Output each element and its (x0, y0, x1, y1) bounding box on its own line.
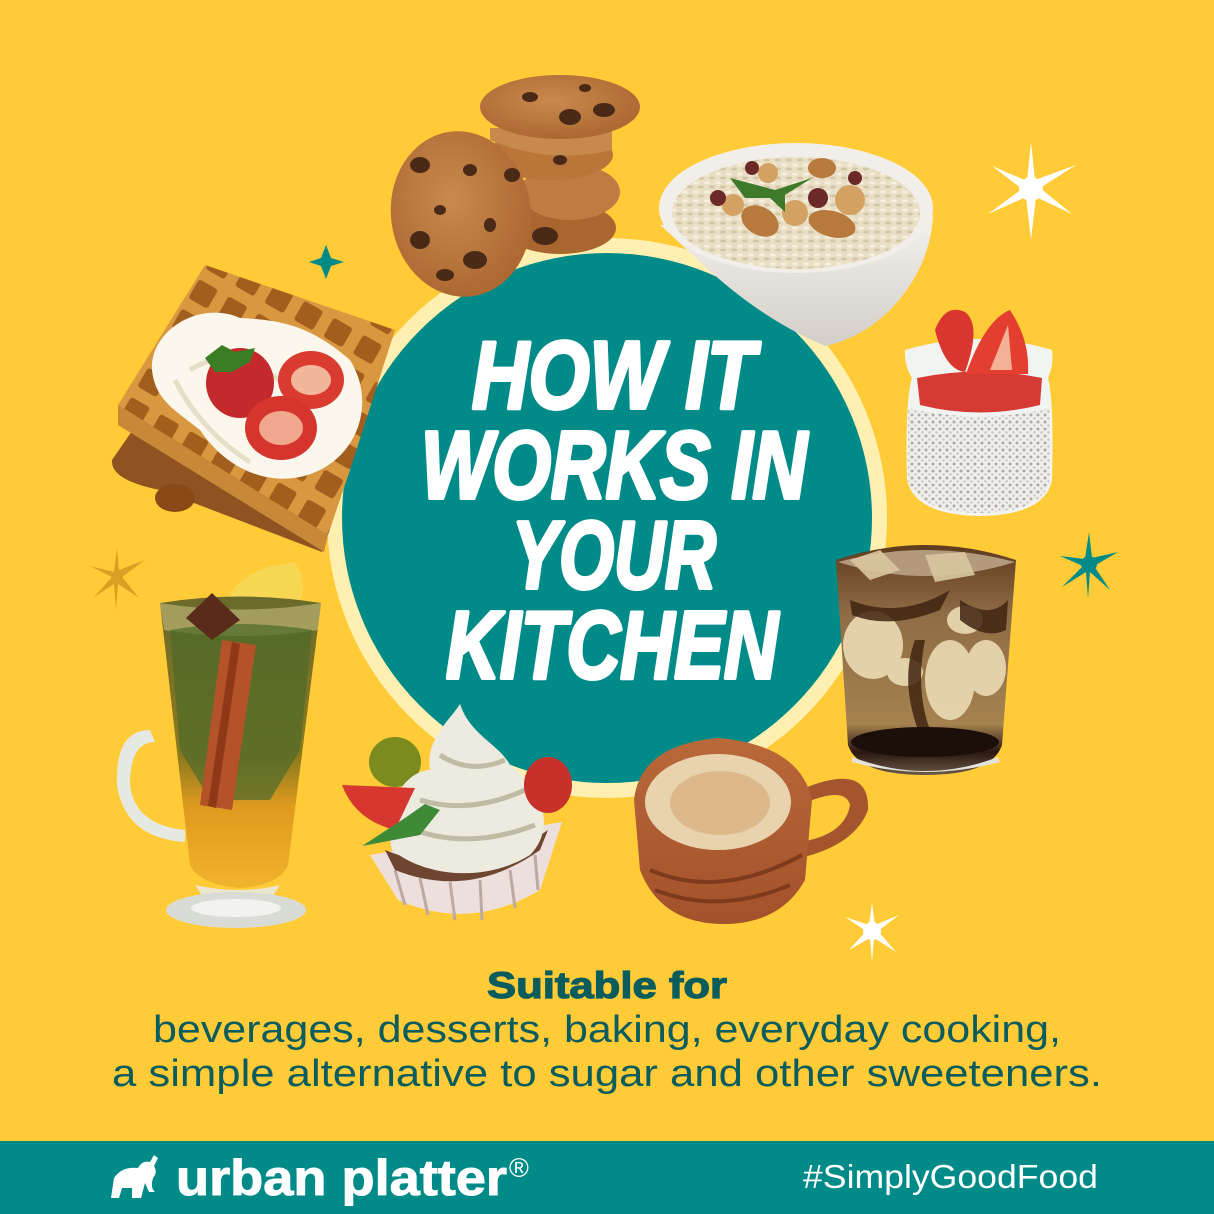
food: oatmeal bowl (659, 143, 933, 346)
food: cupcake (342, 704, 572, 920)
icon: elephant logo (111, 1155, 158, 1198)
title (421, 322, 808, 699)
title: HOW IT (472, 322, 761, 429)
title: WORKS IN (421, 412, 808, 519)
sparkle: teal top left (309, 245, 344, 279)
heading: suitable for: Suitable for (487, 965, 727, 1006)
registered mark: ® (509, 1153, 529, 1183)
food: clay cup of chai (634, 738, 868, 924)
sparkle: teal right (1060, 532, 1118, 598)
hashtag: #SimplyGoodFood (803, 1158, 1098, 1195)
text block: uses: beverages, desserts, baking, everyday cooking, (153, 1009, 1061, 1051)
brand name: urban platter (176, 1150, 507, 1206)
footer bar (0, 1141, 1214, 1214)
sparkle: gold left (90, 548, 145, 610)
title: KITCHEN (446, 592, 779, 699)
text block: uses: a simple alternative to sugar and other sweeteners. (112, 1053, 1102, 1095)
food: iced coffee glass (836, 545, 1016, 775)
title: YOUR (512, 502, 716, 609)
food: cookies (380, 75, 640, 306)
text block: uses (112, 1009, 1102, 1095)
food: chia jar (905, 310, 1052, 516)
sparkle: white bottom (845, 903, 899, 962)
food: tea glass (117, 563, 321, 928)
central circle with cream ring (327, 238, 887, 798)
food: waffles with strawberries (112, 265, 395, 552)
sparkle: large white top right (988, 142, 1076, 240)
